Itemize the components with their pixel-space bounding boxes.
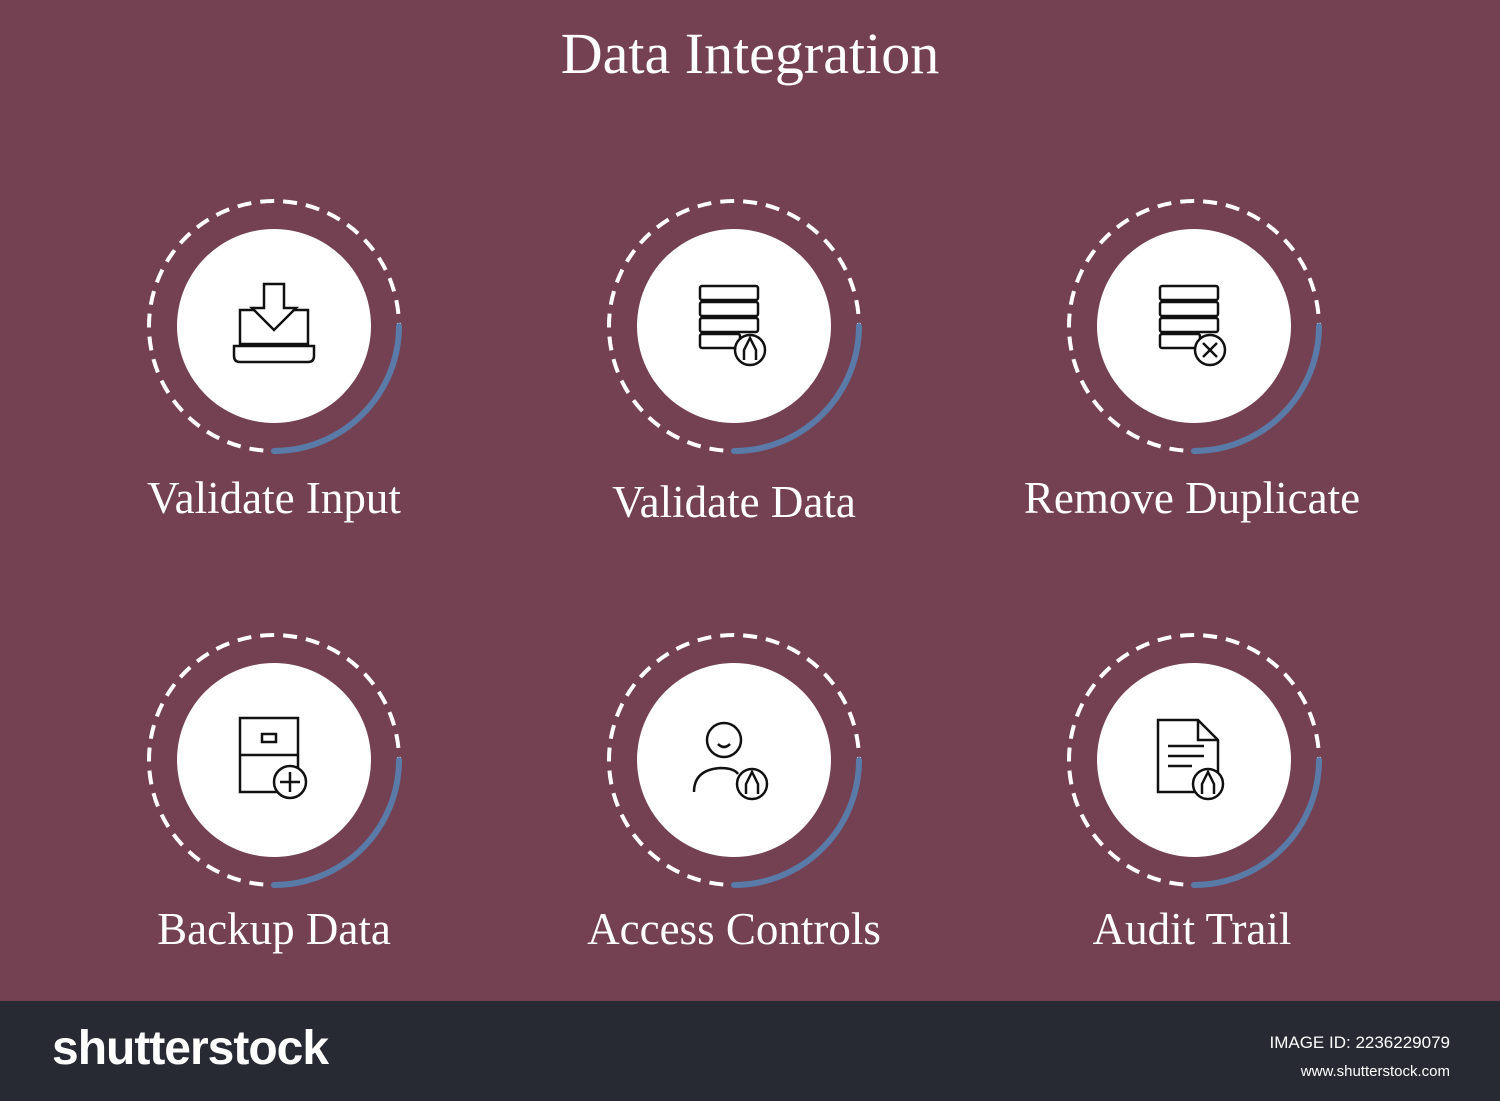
step: Access Controls <box>609 635 859 885</box>
icon: database edit <box>700 286 765 365</box>
label: Remove Duplicate: Remove Duplicate <box>1024 473 1360 523</box>
footer image id: IMAGE ID: 2236229079 <box>1269 1033 1450 1052</box>
footer logo: shutterstock <box>52 1022 328 1075</box>
step: Validate Input <box>149 201 399 451</box>
label: Access Controls: Access Controls <box>587 904 881 954</box>
icon: document edit <box>1158 720 1223 799</box>
icon: database remove <box>1160 286 1225 365</box>
icon: laptop download <box>234 284 314 362</box>
step: Validate Data <box>609 201 859 451</box>
label: Validate Input: Validate Input <box>147 473 401 523</box>
icon: user edit <box>694 723 767 799</box>
label: Validate Data: Validate Data <box>612 477 856 527</box>
footer image id <box>1269 1033 1450 1080</box>
step: Audit Trail <box>1069 635 1319 885</box>
footer bar <box>0 1001 1500 1101</box>
label: Audit Trail: Audit Trail <box>1093 904 1291 954</box>
step: Backup Data <box>149 635 399 885</box>
title: Data Integration <box>561 21 939 86</box>
footer image id: www.shutterstock.com <box>1301 1063 1450 1080</box>
step: Remove Duplicate <box>1069 201 1319 451</box>
label: Backup Data: Backup Data <box>157 904 391 954</box>
icon: cabinet add <box>240 718 306 798</box>
